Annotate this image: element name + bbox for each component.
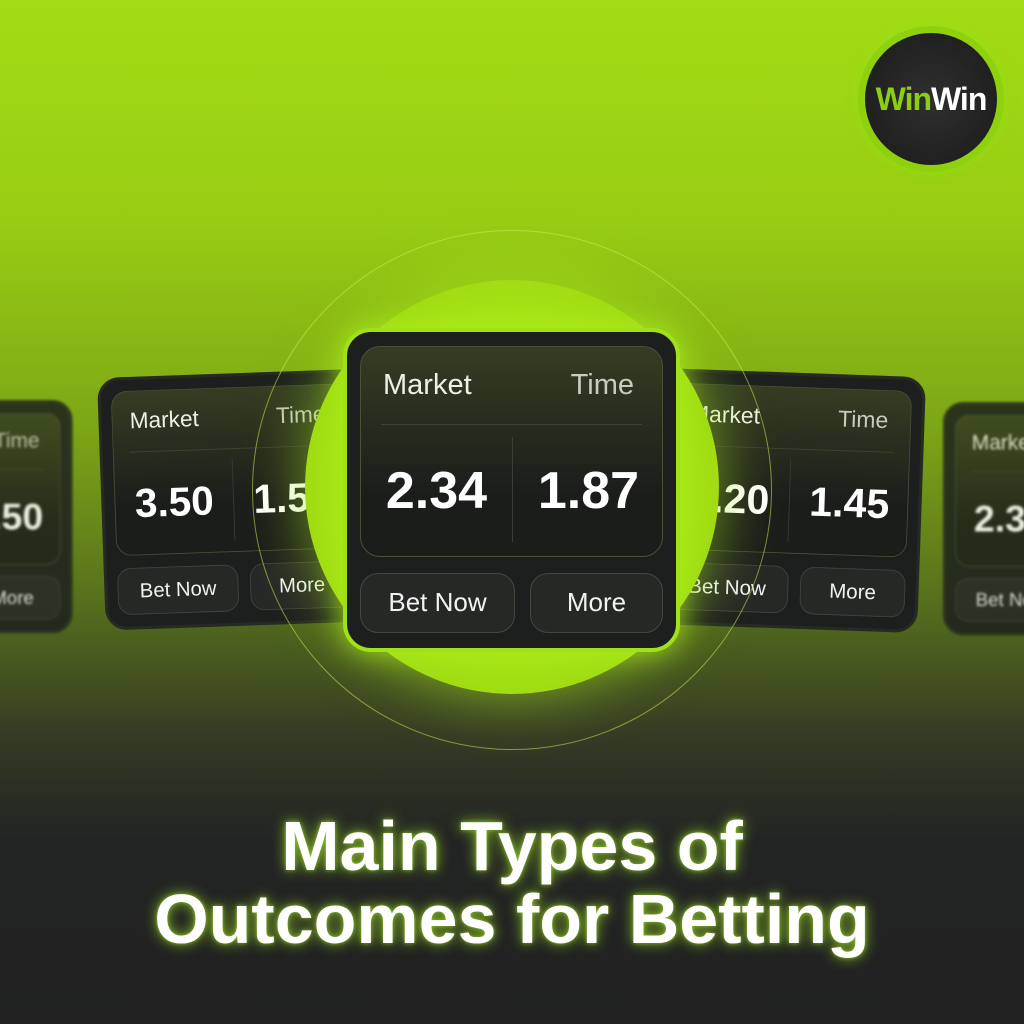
right card: Time: [838, 407, 889, 434]
left card: Market: [129, 406, 199, 434]
right card: 1.45: [809, 479, 890, 528]
left card: Time: [276, 402, 326, 429]
right card: Market: [690, 401, 760, 429]
logo: [858, 26, 1004, 172]
center card: 2.34: [386, 462, 487, 520]
title: [147, 807, 876, 968]
center card: More: [567, 587, 626, 617]
center card: [343, 328, 680, 652]
right card: 1.20: [689, 475, 770, 524]
left card: More: [279, 572, 326, 597]
title: Outcomes for Betting: [154, 880, 870, 958]
center card: Market: [383, 369, 472, 401]
left card: 3.50: [134, 479, 215, 527]
logo: WinWin: [876, 81, 986, 117]
center card: Time: [571, 369, 634, 401]
far left card: [0, 400, 73, 633]
right card: [651, 368, 926, 633]
right card: More: [829, 579, 876, 604]
left card: [97, 369, 369, 631]
glow circle: [305, 280, 719, 694]
far right card: [943, 402, 1024, 635]
right card: Bet Now: [688, 574, 766, 600]
left card: Bet Now: [139, 576, 217, 602]
left card: 1.56: [253, 474, 333, 522]
glow ring: [252, 230, 772, 750]
center card: 1.87: [538, 462, 639, 520]
title: Main Types of: [281, 807, 743, 885]
center card: Bet Now: [388, 587, 487, 617]
